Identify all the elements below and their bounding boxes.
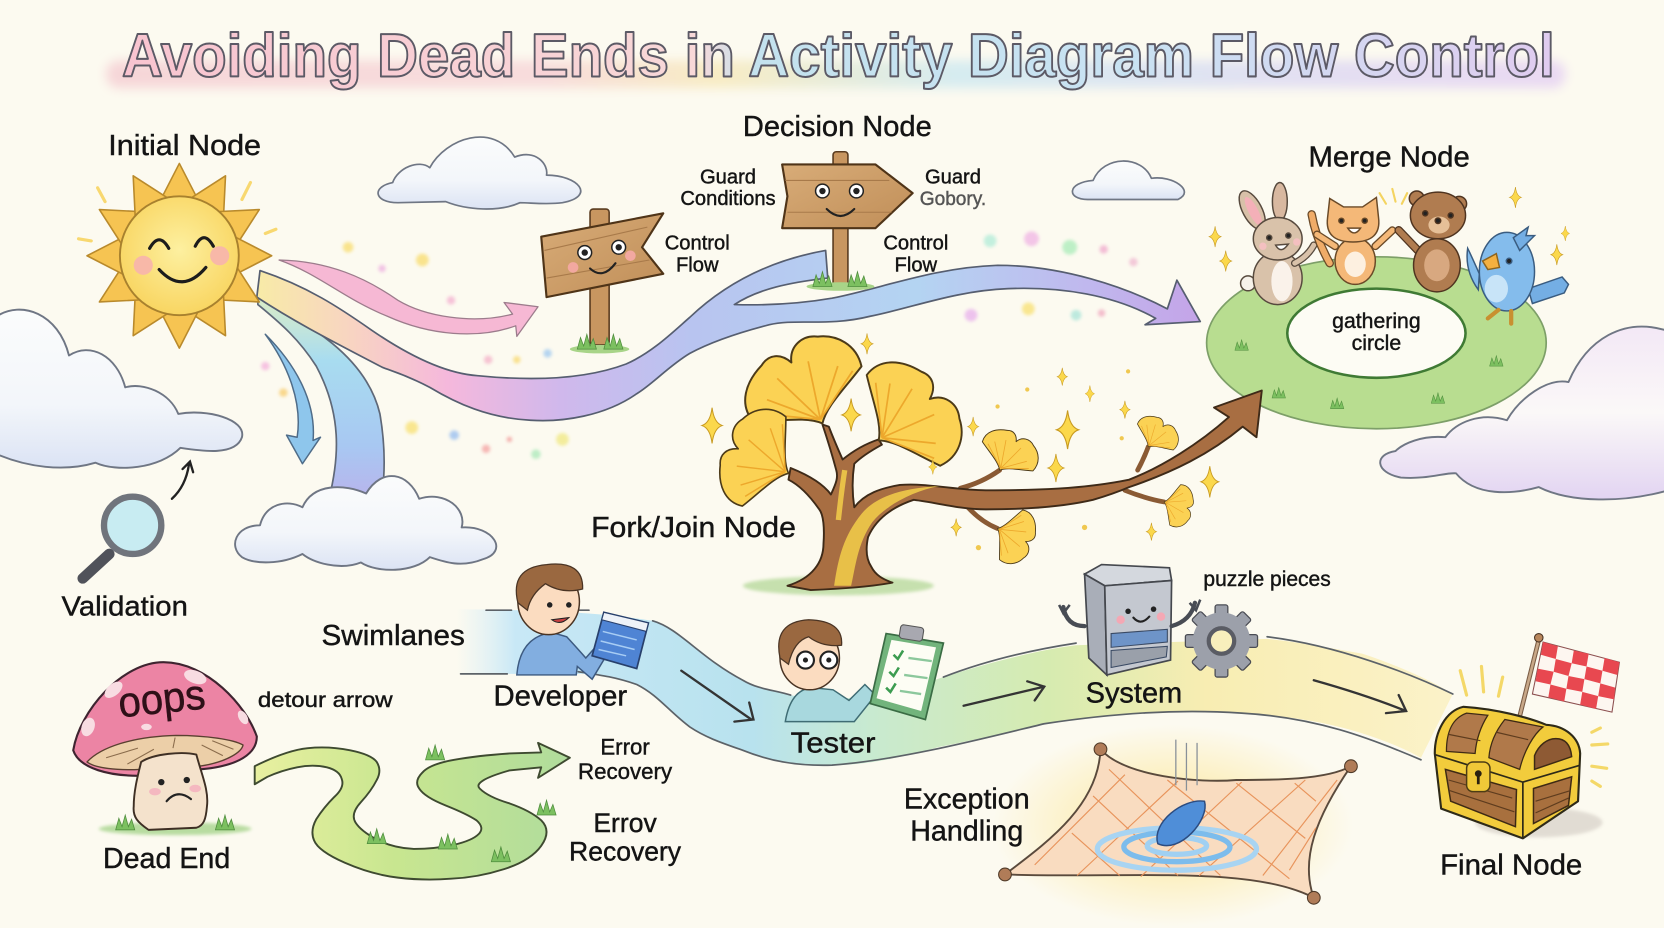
cloud: under the rainbow xyxy=(235,476,496,570)
icon: gear xyxy=(1185,605,1258,677)
heading: fork join node: Fork/Join Node xyxy=(591,512,796,544)
arrow: green detour path xyxy=(255,743,570,880)
label: final node: Final Node xyxy=(1440,849,1582,881)
label: guard conditions right xyxy=(920,167,986,210)
label: developer: Developer xyxy=(493,681,628,713)
cloud: right xyxy=(1380,327,1664,499)
arrow: blue branch down xyxy=(265,334,320,464)
label: control flow left: Flow xyxy=(676,255,719,277)
label: exception handling: Handling xyxy=(910,815,1023,847)
cloud: top small xyxy=(378,137,581,209)
label: error recovery small: Error xyxy=(600,735,650,760)
label: control flow right: Flow xyxy=(895,255,938,277)
icon: server character xyxy=(1059,565,1200,675)
title: Avoiding Dead Ends in Activity Diagram Flow Control xyxy=(122,21,1555,90)
icon: ginkgo tree with brown arrow xyxy=(705,320,1262,590)
label: error recovery small xyxy=(578,735,673,784)
label: puzzle pieces: puzzle pieces xyxy=(1203,568,1331,591)
icon: developer character xyxy=(516,564,648,679)
ribbon arrows xyxy=(681,671,1406,722)
icon: cat xyxy=(1312,197,1392,284)
label: detour arrow: detour arrow xyxy=(258,689,393,712)
icon: treasure chest with flag xyxy=(1435,634,1619,838)
heading: swimlanes: Swimlanes xyxy=(322,620,465,652)
label: guard conditions left xyxy=(680,167,776,210)
label: error recovery small: Recovery xyxy=(578,759,673,784)
flow: rainbow down to cloud xyxy=(258,297,384,499)
label: control flow right xyxy=(883,232,948,277)
icon: right wooden sign xyxy=(782,152,913,291)
label: guard conditions right: Guard xyxy=(925,167,981,189)
label: exception handling: Exception xyxy=(904,784,1030,816)
heading: decision node: Decision Node xyxy=(743,111,932,143)
cloud: left xyxy=(0,310,242,468)
label: tester: Tester xyxy=(791,727,876,759)
icon: oops mushroom xyxy=(73,662,257,835)
confetti dots xyxy=(261,231,1138,459)
sparkles around the tree xyxy=(702,333,1219,550)
cloud: top right small xyxy=(1072,161,1184,200)
heading: merge node: Merge Node xyxy=(1308,142,1470,174)
label: validation: Validation xyxy=(62,591,188,622)
icon: smiling sun xyxy=(79,163,276,348)
label: system: System xyxy=(1086,678,1182,710)
icon: tester character xyxy=(779,620,943,722)
label: error recovery large xyxy=(569,808,682,867)
label: error recovery large: Recovery xyxy=(569,837,682,867)
icon: left wooden sign xyxy=(541,209,663,353)
heading: initial node: Initial Node xyxy=(108,130,261,162)
label: gathering circle: circle xyxy=(1352,332,1401,355)
title brush underline xyxy=(106,60,1565,88)
icon: merge grass ring xyxy=(1207,257,1546,429)
icon: blue bird xyxy=(1467,227,1568,324)
icon: rabbit xyxy=(1234,183,1314,305)
icon: safety net with stone xyxy=(999,740,1357,904)
label: guard conditions left: Guard xyxy=(700,167,756,189)
exception net glow xyxy=(992,725,1353,926)
label: control flow left: Control xyxy=(665,232,730,254)
label: error recovery large: Errov xyxy=(593,808,657,838)
swimlane ribbon xyxy=(456,609,1453,765)
arrow: main rainbow flow to merge xyxy=(257,250,1200,421)
label: gathering circle xyxy=(1332,310,1421,355)
sparkles around merge node xyxy=(1209,187,1570,271)
label: oops: oops xyxy=(116,671,207,726)
swimlane lines xyxy=(461,610,1453,765)
arrow: pink branch to first decision sign xyxy=(279,260,538,336)
label: control flow right: Control xyxy=(883,232,948,254)
label: gathering circle: gathering xyxy=(1332,310,1421,333)
icon: magnifying glass xyxy=(83,462,193,578)
icon: bear xyxy=(1399,191,1467,292)
label: exception handling xyxy=(904,784,1030,847)
label: guard conditions right: Gobory. xyxy=(920,189,986,210)
tree base grass xyxy=(743,576,934,595)
label: control flow left xyxy=(665,232,730,277)
label: dead end: Dead End xyxy=(103,843,230,875)
label: guard conditions left: Conditions xyxy=(680,188,776,210)
